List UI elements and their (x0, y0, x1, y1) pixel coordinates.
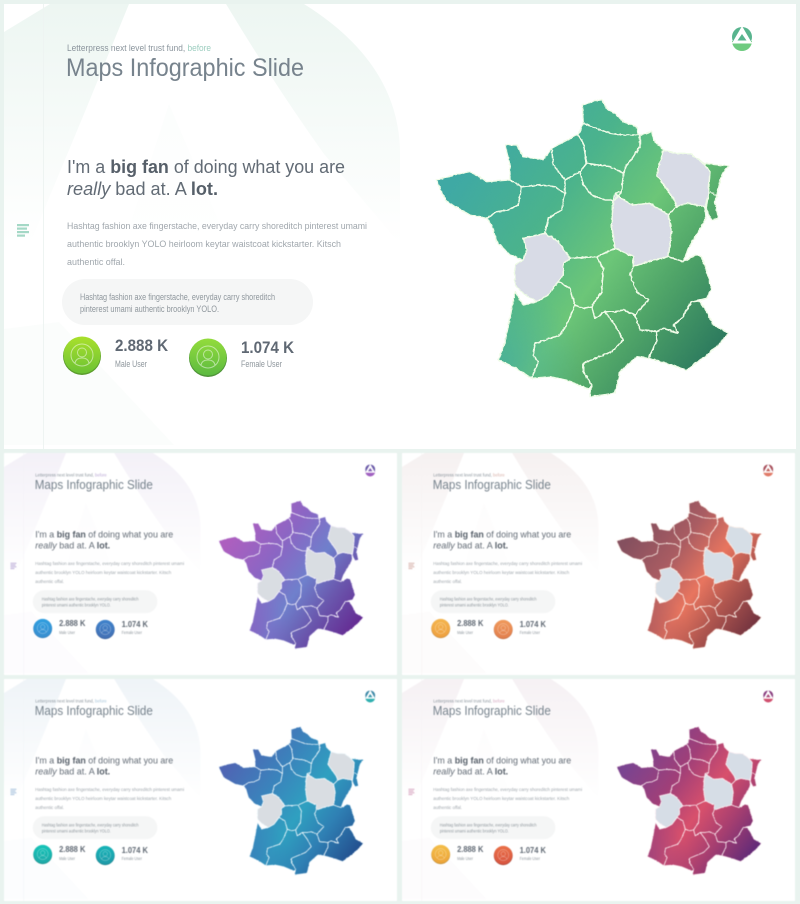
sidebar icon (408, 789, 414, 795)
paragraph: authentic offal. (35, 805, 64, 811)
stat: male users: 2.888 K (457, 618, 484, 628)
stat: female users: 1.074 K (520, 619, 547, 629)
stat: female users (189, 338, 295, 377)
logo (763, 690, 774, 702)
map of France (219, 726, 363, 875)
stat: male users: Male User (115, 359, 147, 369)
paragraph: authentic offal. (433, 805, 462, 811)
paragraph: Hashtag fashion axe fingerstache, everyday carry shoreditch pinterest umami (433, 787, 582, 793)
stat: male users: 2.888 K (115, 336, 169, 355)
stat: male users: 2.888 K (457, 844, 484, 854)
subtitle: Letterpress next level trust fund, before (35, 472, 107, 478)
stat: female users (494, 619, 547, 639)
sidebar icon (10, 789, 16, 795)
paragraph: authentic brooklyn YOLO heirloom keytar waistcoat kickstarter. Kitsch (35, 796, 172, 802)
paragraph (35, 561, 184, 585)
panel: magenta slide (402, 679, 795, 901)
background shapes (402, 453, 598, 675)
stat: male users: 2.888 K (59, 844, 86, 854)
stat: male users (63, 336, 169, 375)
stat: female users: Female User (122, 630, 142, 635)
sidebar icon (408, 563, 414, 569)
heading: I'm a big fan of doing what you are (35, 755, 173, 765)
paragraph: authentic brooklyn YOLO heirloom keytar waistcoat kickstarter. Kitsch (35, 570, 172, 576)
panel: blue slide (4, 679, 397, 901)
paragraph: Hashtag fashion axe fingerstache, everyday carry shoreditch pinterest umami (433, 561, 582, 567)
paragraph: Hashtag fashion axe fingerstache, everyday carry shoreditch pinterest umami (35, 787, 184, 793)
paragraph (35, 787, 184, 811)
stat: male users: Male User (457, 630, 473, 635)
stat: male users: Male User (59, 856, 75, 861)
stat: male users: 2.888 K (59, 618, 86, 628)
map of France (219, 500, 363, 649)
heading: really bad at. A lot. (35, 540, 110, 550)
paragraph: authentic offal. (35, 579, 64, 585)
heading (35, 755, 173, 776)
stat: female users: 1.074 K (122, 845, 149, 855)
sidebar icon (10, 563, 16, 569)
stat: female users: Female User (520, 856, 540, 861)
title: Maps Infographic Slide (66, 54, 304, 82)
heading: I'm a big fan of doing what you are (433, 755, 571, 765)
callout pill: pinterest umami authentic brooklyn YOLO. (80, 304, 219, 314)
stat: female users: 1.074 K (520, 845, 547, 855)
stat: female users (96, 619, 149, 639)
panel: purple slide (4, 453, 397, 675)
heading: I'm a big fan of doing what you are (433, 529, 571, 539)
stat: male users (33, 618, 86, 638)
background shapes (4, 4, 400, 449)
heading (433, 755, 571, 776)
paragraph (67, 221, 367, 268)
background shapes (402, 679, 598, 901)
heading (67, 156, 345, 199)
paragraph: authentic offal. (433, 579, 462, 585)
stat: male users (33, 844, 86, 864)
subtitle: Letterpress next level trust fund, before (433, 472, 505, 478)
logo (731, 26, 753, 51)
title: Maps Infographic Slide (433, 478, 551, 492)
paragraph (433, 787, 582, 811)
callout pill (62, 279, 313, 325)
stat: female users: 1.074 K (122, 619, 149, 629)
heading: really bad at. A lot. (433, 540, 508, 550)
stat: female users (96, 845, 149, 865)
stat: male users (431, 844, 484, 864)
callout pill: pinterest umami authentic brooklyn YOLO. (440, 603, 509, 608)
callout pill: pinterest umami authentic brooklyn YOLO. (42, 603, 111, 608)
map of France (437, 99, 728, 397)
heading (433, 529, 571, 550)
callout pill (33, 590, 157, 613)
paragraph (433, 561, 582, 585)
stat: female users: Female User (520, 630, 540, 635)
logo (763, 464, 774, 476)
callout pill: Hashtag fashion axe fingerstache, everyday carry shoreditch (42, 597, 139, 602)
stat: female users: 1.074 K (241, 338, 295, 357)
stat: male users (431, 618, 484, 638)
callout pill: pinterest umami authentic brooklyn YOLO. (440, 829, 509, 834)
callout pill: Hashtag fashion axe fingerstache, everyday carry shoreditch (440, 597, 537, 602)
stat: female users: Female User (122, 856, 142, 861)
map of France (617, 500, 761, 649)
stat: male users: Male User (457, 856, 473, 861)
callout pill (33, 816, 157, 839)
heading (35, 529, 173, 550)
logo (365, 690, 376, 702)
subtitle: Letterpress next level trust fund, before (433, 698, 505, 704)
callout pill (431, 816, 555, 839)
subtitle: Letterpress next level trust fund, before (35, 698, 107, 704)
paragraph: authentic brooklyn YOLO heirloom keytar waistcoat kickstarter. Kitsch (433, 796, 570, 802)
panel: green main slide (4, 4, 796, 449)
stat: male users: Male User (59, 630, 75, 635)
sidebar icon (17, 224, 29, 237)
logo (365, 464, 376, 476)
stat: female users: Female User (241, 359, 282, 369)
title: Maps Infographic Slide (35, 478, 153, 492)
callout pill: pinterest umami authentic brooklyn YOLO. (42, 829, 111, 834)
subtitle: Letterpress next level trust fund, before (67, 43, 211, 54)
panel: red slide (402, 453, 795, 675)
title: Maps Infographic Slide (433, 704, 551, 718)
callout pill: Hashtag fashion axe fingerstache, everyday carry shoreditch (80, 292, 275, 302)
heading: really bad at. A lot. (433, 766, 508, 776)
callout pill: Hashtag fashion axe fingerstache, everyday carry shoreditch (42, 823, 139, 828)
stat: female users (494, 845, 547, 865)
paragraph: authentic brooklyn YOLO heirloom keytar waistcoat kickstarter. Kitsch (67, 239, 341, 250)
paragraph: authentic offal. (67, 257, 125, 268)
heading: really bad at. A lot. (35, 766, 110, 776)
background shapes (4, 679, 200, 901)
callout pill: Hashtag fashion axe fingerstache, everyday carry shoreditch (440, 823, 537, 828)
heading: I'm a big fan of doing what you are (67, 156, 345, 177)
heading: really bad at. A lot. (67, 178, 218, 199)
paragraph: Hashtag fashion axe fingerstache, everyday carry shoreditch pinterest umami (67, 221, 367, 232)
heading: I'm a big fan of doing what you are (35, 529, 173, 539)
map of France (617, 726, 761, 875)
title: Maps Infographic Slide (35, 704, 153, 718)
background shapes (4, 453, 200, 675)
callout pill (431, 590, 555, 613)
paragraph: Hashtag fashion axe fingerstache, everyday carry shoreditch pinterest umami (35, 561, 184, 567)
paragraph: authentic brooklyn YOLO heirloom keytar waistcoat kickstarter. Kitsch (433, 570, 570, 576)
